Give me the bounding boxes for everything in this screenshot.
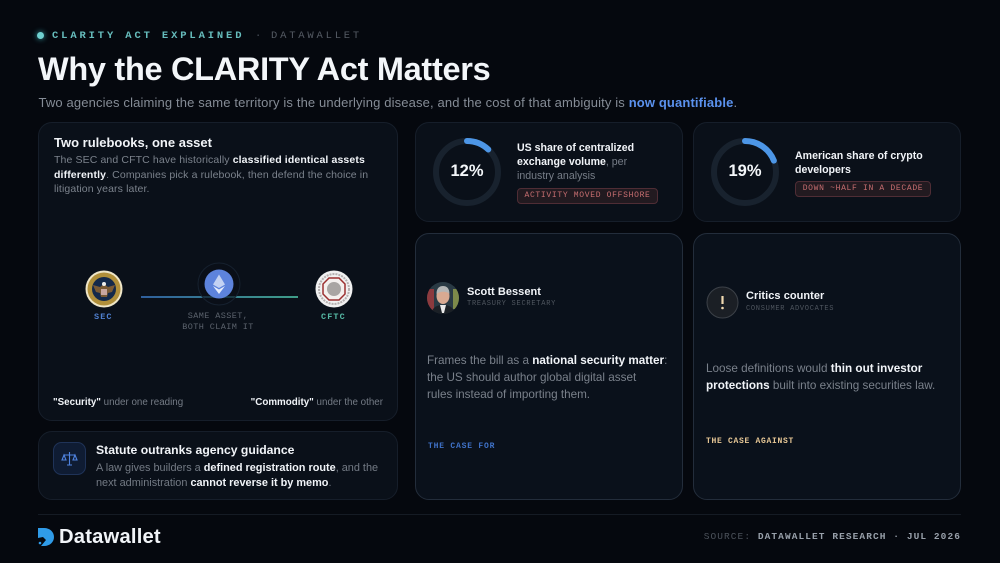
stat description: American share of crypto: [795, 150, 923, 162]
donut chart 19%: [711, 138, 779, 206]
icon: CFTC seal: [316, 270, 352, 308]
eyebrow: CLARITY ACT EXPLAINED: [52, 30, 244, 42]
jurisdiction diagram: [86, 262, 352, 308]
note: security: "Security" under one reading: [53, 397, 183, 408]
tag: down half: DOWN ~HALF IN A DECADE: [803, 184, 923, 193]
statute text: next administration cannot reverse it by memo.: [96, 476, 331, 488]
stat card: 12 percent: [415, 122, 683, 222]
logo: [38, 526, 161, 548]
eyebrow: DATAWALLET: [271, 30, 362, 42]
speaker role: TREASURY SECRETARY: [467, 300, 556, 308]
portrait: Scott Bessent: [427, 282, 459, 314]
tag: down half: [795, 181, 931, 196]
stat description: industry analysis: [517, 170, 595, 182]
donut chart 12%: 12%: [450, 162, 484, 180]
subtitle: Two agencies claiming the same territory is the underlying disease, and the cost of that ambiguity is now quantifiable.: [38, 94, 737, 110]
wordmark: Datawallet: [59, 526, 161, 548]
speaker name: Scott Bessent: [467, 286, 541, 298]
source line: SOURCE: DATAWALLET RESEARCH · JUL 2026: [704, 531, 961, 542]
eyebrow: [34, 28, 362, 42]
label: CFTC: CFTC: [321, 312, 346, 322]
argument text: [706, 362, 935, 392]
panel: case against: [693, 233, 961, 500]
tag: activity moved offshore: [517, 188, 658, 204]
argument text: Frames the bill as a national security matter:: [427, 354, 667, 367]
connector line: [141, 296, 298, 298]
stat description: exchange volume, per: [517, 156, 627, 168]
stat description: US share of centralized: [517, 142, 634, 154]
speaker name: Critics counter: [746, 290, 824, 302]
argument text: [427, 354, 667, 401]
icon: scales: [53, 442, 86, 475]
donut chart 12%: [433, 138, 501, 206]
panel description: [54, 154, 368, 195]
argument text: the US should author global digital asset: [427, 371, 636, 384]
statute text: [96, 462, 378, 488]
speaker role: CONSUMER ADVOCATES: [746, 304, 834, 312]
center caption: SAME ASSET,: [188, 311, 248, 321]
panel: case for: [415, 233, 683, 500]
stat description: [795, 150, 923, 176]
note: commodity: "Commodity" under the other: [251, 397, 383, 408]
stat description: developers: [795, 164, 851, 176]
icon: Ethereum: [198, 263, 240, 305]
panel description: differently. Companies pick a rulebook, then defend the choice in: [54, 169, 368, 181]
icon: SEC seal: [86, 270, 122, 308]
panel description: litigation years later.: [54, 183, 150, 195]
panel heading: Two rulebooks, one asset: [54, 135, 212, 150]
eyebrow: ·: [255, 30, 264, 42]
panel: statute: [38, 431, 398, 500]
tag: activity moved offshore: ACTIVITY MOVED OFFSHORE: [524, 191, 651, 200]
footer divider: [38, 514, 961, 515]
center caption: [182, 311, 254, 332]
title: Why the CLARITY Act Matters: [38, 50, 490, 86]
panel: two rulebooks: [38, 122, 398, 421]
label: SEC: SEC: [94, 312, 113, 322]
center caption: BOTH CLAIM IT: [182, 322, 254, 332]
label: the case for: THE CASE FOR: [428, 442, 495, 450]
argument text: Loose definitions would thin out investor: [706, 362, 922, 375]
argument text: protections built into existing securities law.: [706, 379, 935, 392]
stat card: 19 percent: [693, 122, 961, 222]
stat description: [517, 142, 634, 182]
label: the case against: THE CASE AGAINST: [706, 436, 794, 446]
argument text: rules instead of importing them.: [427, 388, 590, 401]
icon: warning: [706, 286, 738, 318]
panel description: The SEC and CFTC have historically classified identical assets: [54, 154, 365, 166]
statute text: A law gives builders a defined registration route, and the: [96, 462, 378, 474]
donut chart 19%: 19%: [728, 162, 762, 180]
statute heading: Statute outranks agency guidance: [96, 443, 294, 457]
icon: Datawallet mark: [38, 528, 54, 546]
